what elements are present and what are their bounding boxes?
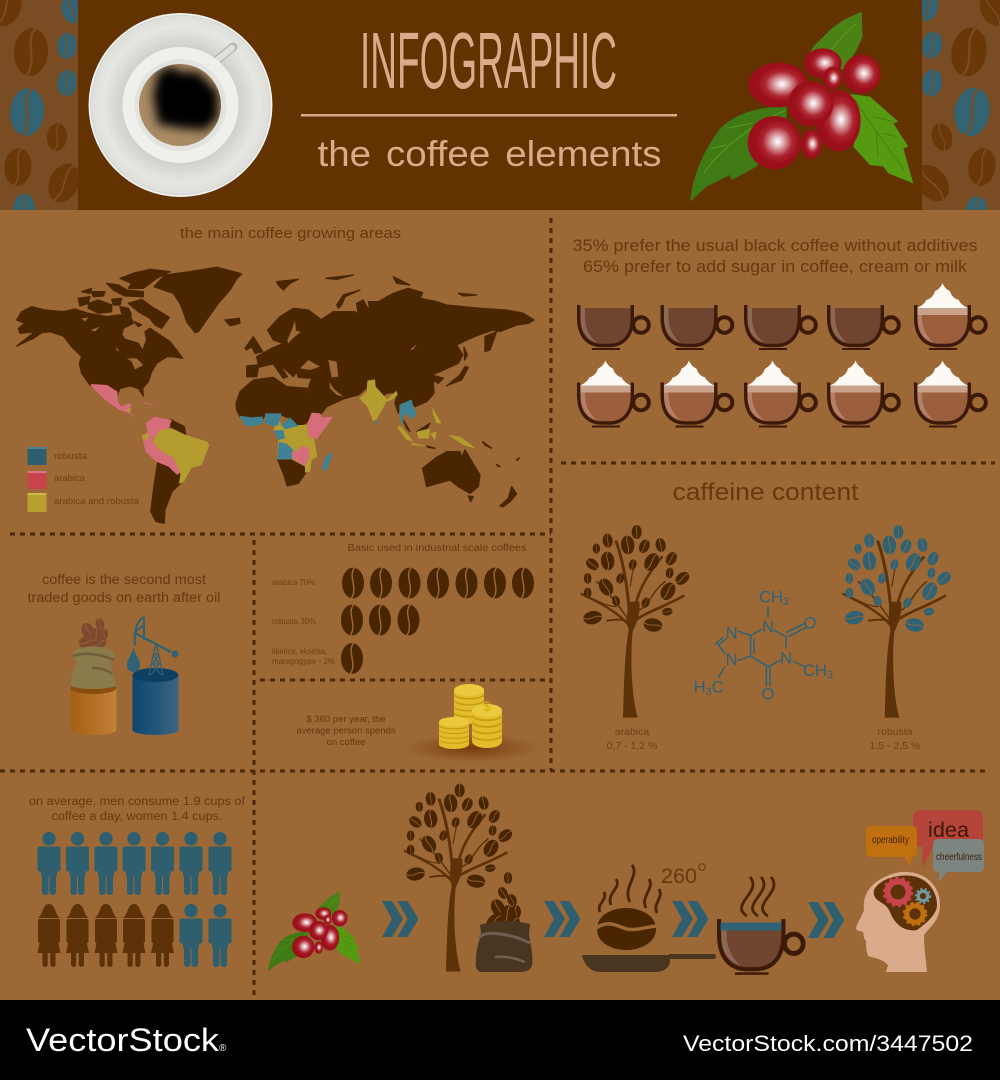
caffeine molecule: 3 (783, 596, 789, 608)
panel: coffee preference cups: 65% prefer to add sugar in coffee, cream or milk (583, 258, 968, 276)
arabica label: arabica (615, 726, 649, 738)
men pictogram row (38, 832, 232, 895)
bean pictogram rows (341, 568, 534, 674)
icon: coin stacks: $ (483, 698, 491, 714)
map legend (28, 447, 140, 512)
panel: growing areas map (17, 225, 534, 523)
world map (17, 267, 534, 523)
robusta label: robusta (877, 726, 913, 738)
icon: coffee berries (690, 12, 913, 202)
icon: coffee tree (405, 784, 515, 971)
caffeine molecule: C (712, 677, 724, 696)
heading: Basic used in industrial scale coffees (348, 542, 526, 554)
icon: sack of beans (476, 872, 532, 972)
speech bubble: cheerfulness (933, 839, 984, 882)
row labels: arabica 70% (272, 578, 315, 587)
temperature label: 260 (661, 865, 697, 888)
panel: coffee preference cups (572, 237, 986, 428)
icon: coffee sack on cylinder (70, 617, 116, 735)
arabica label: 0,7 - 1,2 % (607, 740, 657, 752)
caffeine molecule: 3 (706, 686, 712, 698)
map legend: arabica (54, 473, 86, 484)
heading: the main coffee growing areas (180, 225, 401, 242)
panel: second most traded: traded goods on earth after oil (28, 590, 220, 605)
arabica tree (582, 525, 692, 718)
row labels: robusta 30% (272, 617, 316, 626)
caffeine molecule (694, 587, 833, 704)
panel: consumption by gender (29, 796, 246, 967)
icon: coin stacks (404, 684, 540, 762)
subtitle: the coffee elements (318, 133, 662, 174)
traded text: coffee is the second most (42, 572, 206, 587)
panel: from berry to brain process (268, 784, 984, 975)
robusta label: 1,5 - 2,5 % (870, 740, 920, 752)
robusta label (870, 726, 920, 752)
spend text: on coffee (327, 737, 365, 748)
arrow 1 (382, 901, 418, 937)
speech bubble: operability: operability (872, 834, 910, 846)
header banner: INFOGRAPHIC (360, 16, 617, 105)
footer left brand: VectorStock (26, 1022, 220, 1058)
Eurasia (230, 274, 534, 413)
right bean strip (922, 0, 1000, 210)
arrow 3 (672, 901, 708, 937)
icon: head with gears (856, 872, 940, 972)
panel: industrial coffees (272, 542, 534, 674)
speech bubble: cheerfulness: cheerfulness (936, 851, 982, 863)
banner centre (78, 0, 922, 210)
panel: yearly spend (296, 684, 540, 762)
icon: berries (268, 892, 361, 972)
bottom cup row (579, 360, 986, 428)
caffeine molecule: N (780, 649, 792, 668)
map legend: arabica and robusta (54, 496, 140, 507)
Latin America (91, 384, 209, 523)
women pictogram row (38, 904, 232, 967)
arabica label (607, 726, 657, 752)
divider (301, 114, 677, 116)
caffeine molecule: 3 (827, 670, 833, 682)
header banner (0, 0, 1000, 226)
caffeine molecule: N (726, 623, 738, 642)
panel: caffeine content (582, 479, 953, 752)
section dividers (0, 218, 995, 995)
left bean strip (0, 0, 78, 210)
row labels: maragogype - 2% (272, 657, 335, 666)
caffeine molecule: H (694, 677, 706, 696)
footer right url: VectorStock.com/3447502 (683, 1031, 973, 1056)
icon: oil pump on barrel (127, 617, 178, 735)
arrow 2 (544, 901, 580, 937)
icon: cup with steam (719, 877, 803, 975)
spend text: average person spends (296, 726, 396, 736)
icon: coffee cup from above (88, 13, 272, 197)
caffeine molecule: O (761, 685, 774, 704)
row labels (272, 578, 335, 666)
map legend: robusta (54, 451, 88, 462)
footer bar (0, 1000, 1000, 1080)
footer bar: ® (219, 1043, 227, 1054)
icon: bean roasting in pan (582, 865, 716, 972)
Africa, South Asia and Oceania (236, 377, 519, 507)
speech bubble: operability (866, 826, 917, 867)
speech bubble: idea (913, 810, 983, 868)
arrow 4 (808, 902, 844, 938)
panel: consumption by gender: coffee a day, women 1.4 cups. (52, 811, 222, 823)
top cup row (579, 283, 986, 350)
panel: second most traded (28, 572, 220, 735)
caffeine molecule: CH (759, 587, 783, 606)
robusta tree (843, 525, 953, 718)
preference text: 35% prefer the usual black coffee without additives (572, 237, 978, 255)
row labels: liberica, ekselsa, (272, 647, 327, 656)
spend text (296, 714, 396, 748)
caffeine molecule: CH (803, 661, 827, 680)
caffeine molecule: O (803, 613, 816, 632)
spend text: $ 360 per year, the (306, 714, 386, 725)
caffeine molecule: N (762, 618, 774, 637)
North America and Greenland (17, 267, 240, 396)
speech bubble: idea: idea (928, 819, 969, 842)
heading: caffeine content (672, 479, 859, 506)
caffeine molecule: N (726, 650, 738, 669)
consumption text: on average, men consume 1.9 cups of (29, 796, 246, 808)
